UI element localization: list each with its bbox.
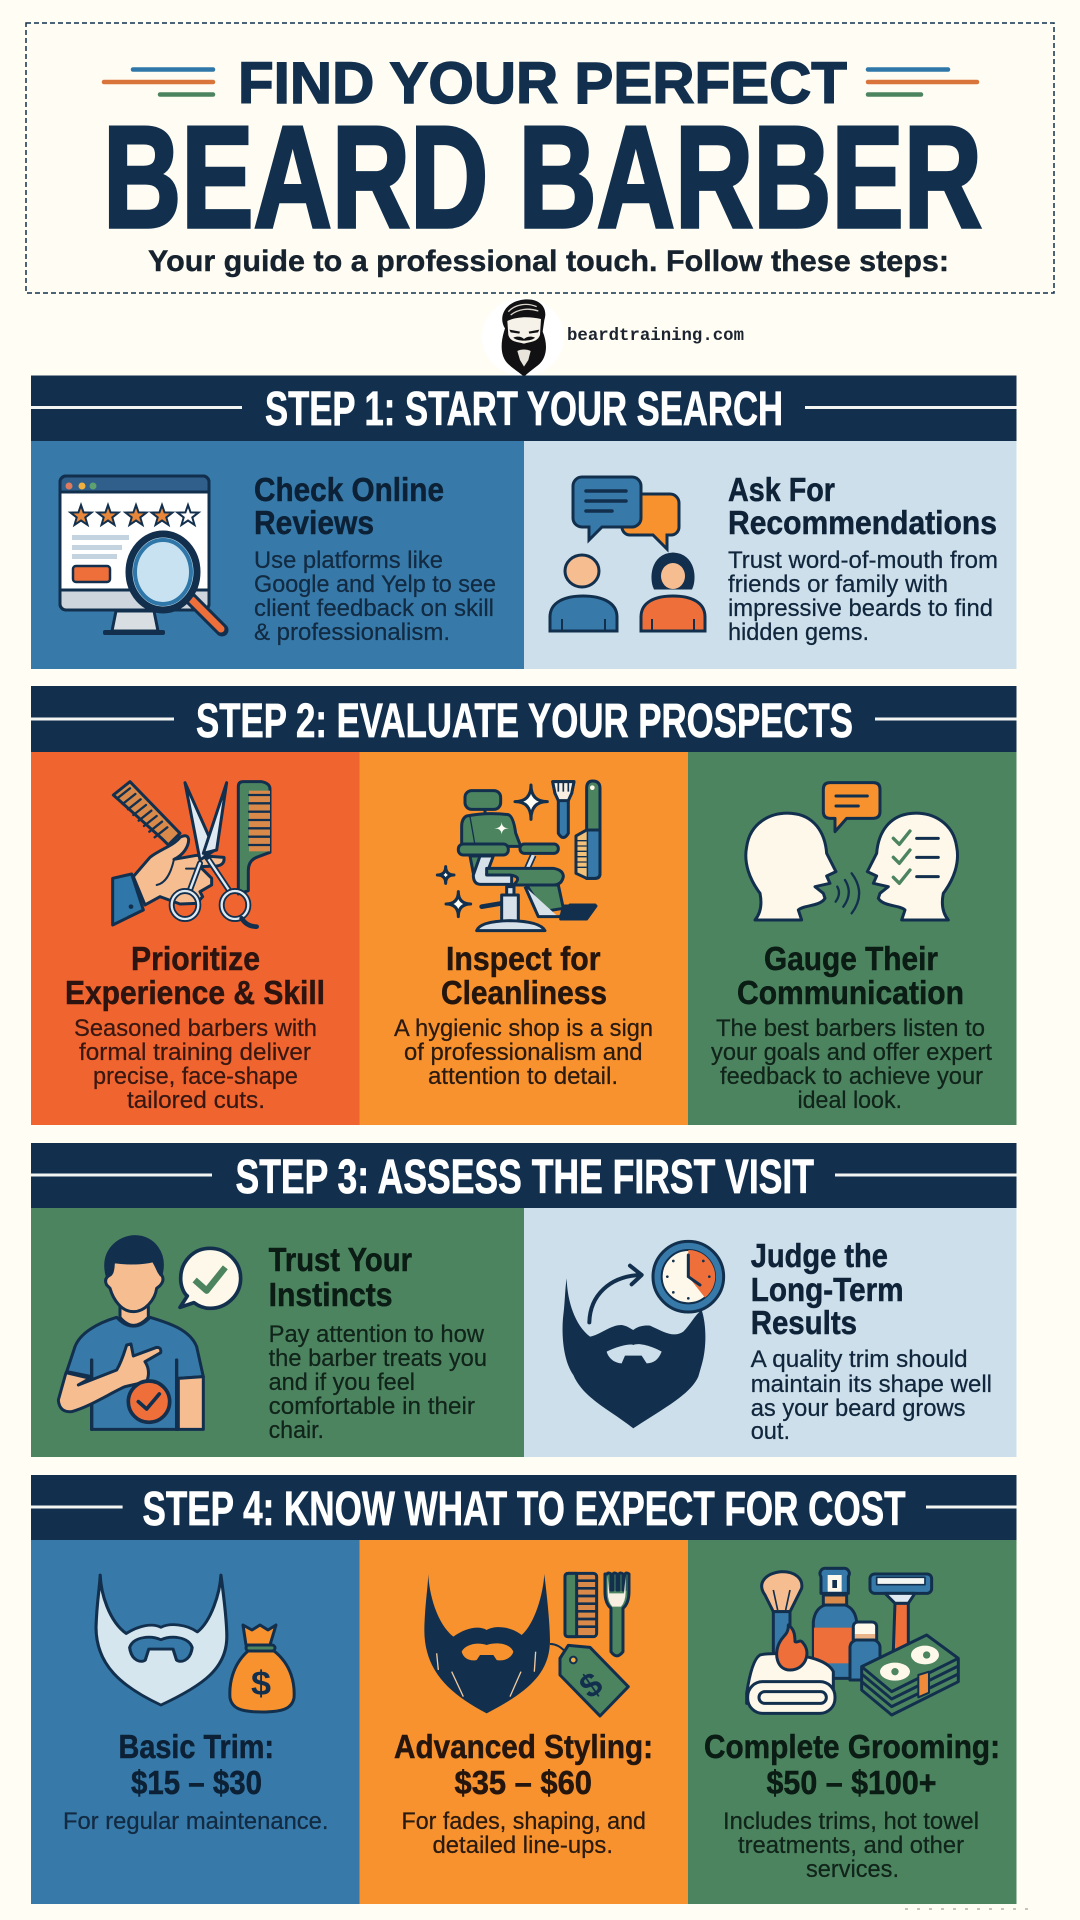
check online reviews text: Google and Yelp to see (254, 571, 496, 598)
judge long-term results text (751, 1346, 992, 1445)
complete grooming title and price: Complete Grooming: (704, 1728, 1000, 1765)
step 1 banner (31, 376, 1016, 441)
panel: judge long-term results (524, 1208, 1016, 1457)
judge long-term results title: Results (751, 1304, 857, 1341)
trust your instincts text: comfortable in their (269, 1393, 475, 1420)
step 4 section (31, 1475, 1016, 1904)
step 3 banner: STEP 3: ASSESS THE FIRST VISIT (236, 1151, 814, 1204)
panel: experience and skill (31, 752, 360, 1125)
inspect for cleanliness title: Inspect for (446, 940, 601, 977)
check online reviews title: Reviews (254, 504, 374, 541)
icon: hand with scissors and combs (113, 782, 270, 927)
judge long-term results text: maintain its shape well (751, 1371, 992, 1398)
advanced styling text: detailed line-ups. (432, 1832, 613, 1859)
inspect for cleanliness text (394, 1015, 653, 1090)
judge long-term results title (751, 1237, 904, 1341)
inspect for cleanliness title: Cleanliness (441, 974, 607, 1011)
judge long-term results title: Long-Term (751, 1271, 904, 1308)
step 4 banner (31, 1475, 1016, 1540)
complete grooming text (723, 1808, 979, 1883)
gauge communication text: ideal look. (798, 1087, 902, 1114)
prioritize experience text: precise, face-shape (93, 1063, 298, 1090)
header panel (26, 23, 1054, 293)
complete grooming text: Includes trims, hot towel (723, 1808, 979, 1835)
complete grooming text: treatments, and other (738, 1832, 964, 1859)
basic trim text: For regular maintenance. (63, 1808, 328, 1835)
step 2 banner (31, 686, 1016, 752)
trust your instincts text: Pay attention to how (269, 1321, 485, 1348)
trust your instincts text: and if you feel (269, 1369, 415, 1396)
gauge communication title: Gauge Their (764, 940, 938, 977)
judge long-term results text: out. (751, 1418, 790, 1445)
gauge communication text: feedback to achieve your (720, 1063, 983, 1090)
prioritize experience text: formal training deliver (79, 1039, 311, 1066)
logo: bearded man and site name (482, 298, 744, 377)
basic trim title and price: Basic Trim: (118, 1728, 274, 1765)
gauge communication text (711, 1015, 992, 1114)
advanced styling title and price (394, 1728, 653, 1801)
judge long-term results text: A quality trim should (751, 1346, 968, 1373)
trust your instincts title: Trust Your (269, 1241, 412, 1278)
inspect for cleanliness title (441, 940, 607, 1011)
check online reviews text: & professionalism. (254, 619, 450, 646)
icon: two people with speech bubbles (550, 477, 705, 631)
subtitle: Your guide to a professional touch. Follow these steps: (148, 245, 949, 278)
panel: communication (688, 752, 1016, 1125)
trust your instincts text: chair. (269, 1417, 324, 1444)
step 1 section (31, 376, 1016, 669)
decorative lines right (868, 70, 977, 94)
check online reviews text (254, 547, 496, 646)
ask for recommendations text (728, 547, 998, 646)
icon: barber chair with sparkles and tools (437, 781, 600, 931)
decorative lines left (104, 70, 213, 94)
panel: cleanliness (360, 752, 688, 1125)
icon: monitor with reviews and magnifier (60, 476, 222, 635)
trust your instincts text: the barber treats you (269, 1345, 487, 1372)
step 3 banner (31, 1143, 1016, 1208)
advanced styling text (402, 1808, 646, 1859)
ask for recommendations text: Trust word-of-mouth from (728, 547, 998, 574)
logo: bearded man and site name: beardtraining.com (567, 327, 744, 346)
panel: check online reviews (31, 441, 524, 669)
gauge communication title: Communication (737, 974, 964, 1011)
title line 1: FIND YOUR PERFECT (238, 51, 847, 116)
ask for recommendations text: impressive beards to find (728, 595, 993, 622)
check online reviews text: Use platforms like (254, 547, 443, 574)
icon: grooming products, towel and cash (747, 1568, 958, 1715)
prioritize experience title (65, 940, 325, 1011)
inspect for cleanliness text: attention to detail. (428, 1063, 618, 1090)
icon: light beard and money bag (96, 1575, 294, 1712)
inspect for cleanliness text: of professionalism and (404, 1039, 642, 1066)
icon: light beard and money bag: $ (251, 1665, 271, 1703)
prioritize experience title: Prioritize (131, 940, 260, 977)
icon: dark beard with comb and price tag: $ (573, 1665, 610, 1706)
trust your instincts title: Instincts (269, 1276, 393, 1313)
complete grooming text: services. (806, 1856, 899, 1883)
prioritize experience title: Experience & Skill (65, 974, 325, 1011)
judge long-term results text: as your beard grows (751, 1395, 966, 1422)
ask for recommendations title: Recommendations (728, 504, 997, 541)
icon: beard with clock (563, 1241, 724, 1428)
gauge communication title (737, 940, 964, 1011)
icon: dark beard with comb and price tag (424, 1573, 629, 1716)
panel: advanced styling (360, 1540, 688, 1904)
panel: ask for recommendations (524, 441, 1016, 669)
check online reviews title (254, 471, 444, 541)
trust your instincts title (269, 1241, 412, 1313)
prioritize experience text (74, 1015, 317, 1114)
complete grooming title and price (704, 1728, 1000, 1801)
ask for recommendations text: friends or family with (728, 571, 948, 598)
panel: trust your instincts (31, 1208, 524, 1457)
gauge communication text: your goals and offer expert (711, 1039, 992, 1066)
check online reviews text: client feedback on skill (254, 595, 494, 622)
advanced styling title and price: $35 – $60 (454, 1764, 592, 1801)
complete grooming title and price: $50 – $100+ (766, 1764, 936, 1801)
gauge communication text: The best barbers listen to (716, 1015, 985, 1042)
advanced styling text: For fades, shaping, and (402, 1808, 646, 1835)
trust your instincts text (269, 1321, 487, 1444)
icon: two heads talking (746, 783, 958, 920)
prioritize experience text: tailored cuts. (127, 1087, 265, 1114)
icon: man pointing at chest with check (58, 1237, 241, 1429)
ask for recommendations title (728, 471, 997, 541)
step 3 section (31, 1143, 1016, 1457)
check online reviews title: Check Online (254, 471, 444, 508)
step 2 section (31, 686, 1016, 1125)
ask for recommendations text: hidden gems. (728, 619, 869, 646)
ask for recommendations title: Ask For (728, 471, 835, 508)
panel: complete grooming (688, 1540, 1016, 1904)
judge long-term results title: Judge the (751, 1237, 888, 1274)
step 1 banner: STEP 1: START YOUR SEARCH (265, 383, 783, 436)
step 2 banner: STEP 2: EVALUATE YOUR PROSPECTS (196, 695, 853, 748)
basic trim title and price: $15 – $30 (131, 1764, 262, 1801)
basic trim title and price (118, 1728, 274, 1801)
inspect for cleanliness text: A hygienic shop is a sign (394, 1015, 653, 1042)
panel: basic trim (31, 1540, 360, 1904)
advanced styling title and price: Advanced Styling: (394, 1728, 653, 1765)
prioritize experience text: Seasoned barbers with (74, 1015, 317, 1042)
